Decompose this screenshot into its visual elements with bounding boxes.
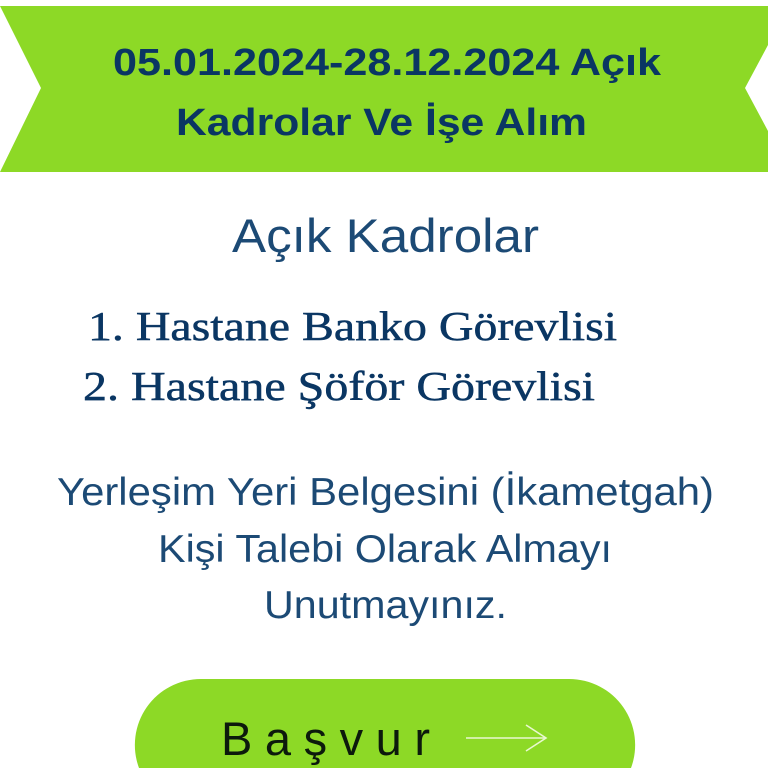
button: apply: [135, 679, 635, 768]
list of open positions: [83, 303, 617, 409]
note paragraph: Kişi Talebi Olarak Almayı: [158, 528, 612, 571]
list of open positions: 1. Hastane Banko Görevlisi: [88, 303, 617, 349]
title: Kadrolar Ve İşe Alım: [176, 102, 587, 144]
icon: arrow: [466, 725, 546, 751]
note paragraph: Yerleşim Yeri Belgesini (İkametgah): [57, 471, 714, 514]
list of open positions: 2. Hastane Şöför Görevlisi: [83, 363, 595, 409]
title: 05.01.2024-28.12.2024 Açık: [113, 42, 662, 84]
button label: Başvur: [221, 712, 430, 765]
note paragraph: [57, 471, 714, 627]
heading: open positions: Açık Kadrolar: [232, 209, 539, 262]
note paragraph: Unutmayınız.: [264, 584, 507, 627]
banner: title ribbon: [0, 6, 768, 172]
title: [113, 42, 662, 144]
